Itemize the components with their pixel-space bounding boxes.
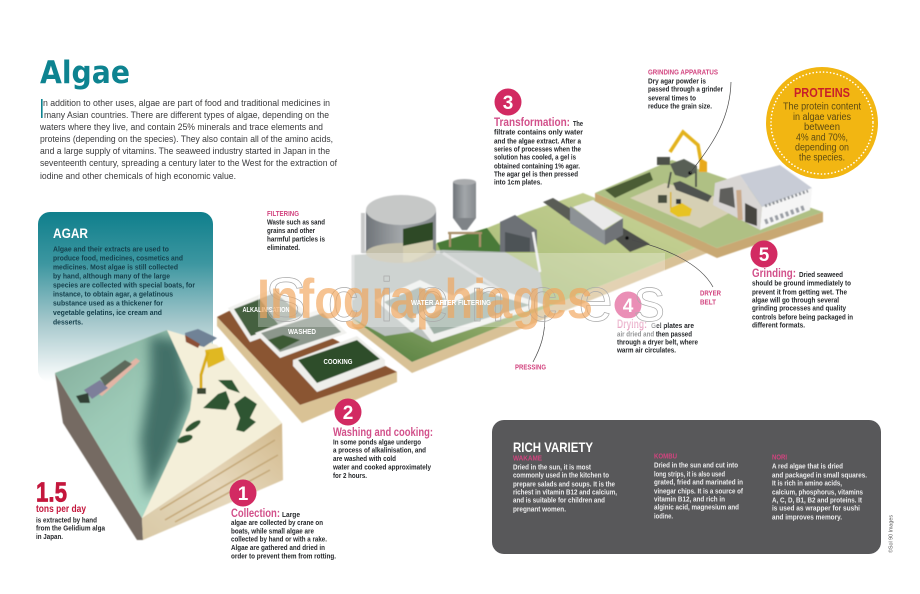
proteins text: 4% and 70%, [796,132,848,144]
pond labels: ALKALINISATION [242,307,290,314]
cooking pond [293,336,385,392]
dryer belt machine [543,198,650,252]
right filter pool [412,282,545,342]
column: kombu: KOMBU [654,454,677,460]
column: wakame: pregnant women. [513,504,566,514]
column: nori: calcium, phosphorus, vitamins [772,488,863,496]
step 3 badge: 3 [503,93,513,114]
seaweed leaves [176,380,257,445]
column: wakame: WAKAME [513,456,542,462]
column: kombu: alginic acid, magnesium and [654,502,739,512]
alkalinisation pond [228,288,315,342]
step 1: collection: Algae are gathered and dried in [231,543,325,552]
label: dryer belt: BELT [700,300,717,306]
drop cap [41,99,43,118]
step 4: drying: through a dryer belt, where [617,338,698,346]
step 4: drying: air dried and then passed [617,330,692,338]
step 4: drying: Gel plates are [651,321,694,330]
column: wakame [513,456,617,514]
label: dryer belt [700,290,721,306]
label: dryer belt: DRYER [700,290,721,298]
column: nori: and improves memory. [772,512,842,522]
column: wakame: commonly used in the kitchen to [513,470,609,480]
leader line: pressing [533,315,545,362]
dark green back lawn [437,228,505,262]
step 2: washing and cooking: In some ponds algae undergo [333,438,421,446]
big silo [353,195,500,300]
watermark fade over drying text [612,318,656,340]
label: filtering: FILTERING [267,211,299,218]
agar text [53,244,195,326]
step 5: grinding: Grinding: [752,266,796,280]
dark shore water [140,335,190,500]
rich variety heading: RICH VARIETY [513,439,594,455]
agar text: desserts. [53,318,83,326]
column: nori: A, C, D, B1, B2 and proteins. It [772,496,862,504]
step 5: grinding: algae will go through several [752,296,839,304]
dryer belt dot [625,236,629,240]
panel: agar [38,212,213,382]
pond labels [242,307,353,366]
step 1: collection: Large [282,510,300,519]
agar text: Algae and their extracts are used to [53,244,169,254]
step 3: transformation: obtained containing 1% agar. [494,162,580,170]
watermark outline text: Sciences [265,266,665,335]
intro text block [39,98,337,182]
agar text: medicines. Most algae is still collected [53,262,178,272]
step 4: drying: Drying: [617,317,647,331]
step 1 badge: 1 [238,484,249,505]
agar text: produce food, medicines, cosmetics and [53,254,183,262]
callout: proteins [766,67,878,179]
illustration: sea and shore block [55,329,283,540]
proteins text: between [804,122,840,133]
stat: 1.5 tons per day [36,476,106,541]
column: kombu: vinegar chips. It is a source of [654,486,743,496]
step 5: grinding: different formats. [752,320,805,330]
step 3: transformation: The [573,119,583,128]
label: water after filtering: WATER AFTER FILTERING [411,300,492,307]
pond labels: COOKING [324,359,353,366]
column: nori: and packaged in small squares. [772,470,867,480]
filter pad [352,250,545,342]
step 2: washing and cooking: water and cooked approximately [332,462,432,472]
label: filtering: Waste such as sand [267,218,325,226]
proteins text [783,102,861,164]
intro text block: many Asian countries. There are different types of algae, depending on the [44,110,329,121]
stat: 1.5 tons per day: tons per day [36,504,86,515]
proteins text: depending on [795,142,849,154]
step 4: drying: warm air circulates. [616,346,676,354]
step 5: grinding: prevent it from getting wet. The [752,288,847,296]
intro text block: n addition to other uses, algae are part of food and traditional medicines in [43,98,330,109]
label: pressing: PRESSING [515,364,546,372]
leader line: dryer belt [632,240,713,287]
crane boat [185,329,217,348]
column: kombu: Dried in the sun and cut into [654,460,738,470]
illustration: washing ponds platform [217,288,397,423]
yellow excavator [197,347,225,394]
callout: proteins: PROTEINS [794,86,850,100]
step 4 badge: 4 [623,296,634,317]
step 5: grinding [750,240,853,330]
agar text: instance, to obtain agar, a gelatinous [53,290,173,298]
column: nori: is used as wrapper for sushi [772,504,860,512]
step 3: transformation: series of processes when the [494,144,581,154]
watermark orange text: Infographiages [257,267,593,330]
column: kombu: long strips, it is also used [654,470,725,478]
agar text: by hand, although many of the large [53,272,170,280]
step 1: collection [230,480,336,560]
agar heading: AGAR [53,226,88,241]
title: Algae [40,55,130,91]
column: nori [772,454,867,522]
crate [658,195,667,203]
step 5: grinding: should be ground immediately to [752,278,851,288]
label: filtering [267,211,325,252]
image credit: ©Sol 90 Images [888,514,894,553]
intro text block: iodine and other chemicals of high economic value. [40,171,236,182]
agar text: species are collected with special boats, for [53,280,195,290]
step 3: transformation: and the algae extract. After a [494,136,582,146]
label: grinding apparatus: Dry agar powder is [648,76,706,86]
stat: 1.5 tons per day: from the Gelidium alga [36,524,106,532]
left filter pool [375,280,458,332]
label: grinding apparatus: passed through a grinder [648,84,723,94]
label: filtering: harmful particles is [267,234,325,244]
storage bins [605,172,653,198]
column: kombu [654,454,743,520]
label: grinding apparatus [648,70,723,110]
proteins text: in algae varies [793,112,851,123]
illustration: grinding platform [595,132,823,258]
warehouse building [713,165,812,230]
forklift [670,192,692,217]
leader line: grinding apparatus [690,82,731,173]
step 5: grinding: grinding processes and quality [752,304,847,312]
step 1: collection: order to prevent them from rotting. [231,552,336,560]
conveyor [673,181,712,202]
step 3: transformation: Transformation: [494,115,570,129]
step 3: transformation [494,88,583,186]
step 2: washing and cooking: Washing and cooking: [333,425,433,439]
proteins text: the species. [799,152,845,164]
proteins text: The protein content [783,102,861,112]
intro text block: and a large supply of vitamins. The seaweed industry started in Japan in the [40,146,330,157]
column: wakame: richest in vitamin B12 and calcium, [513,488,617,496]
label: grinding apparatus: several times to [648,94,696,102]
yellow crane [657,132,707,175]
watermark band [258,253,665,327]
intro text block: seventeenth century, spreading a century later to the West for the extraction of [40,158,337,169]
stat: 1.5 tons per day: 1.5 [36,476,67,508]
stat: 1.5 tons per day: is extracted by hand [36,516,97,524]
step 5 badge: 5 [759,245,770,266]
label: filtering: grains and other [267,226,315,235]
step 5: grinding: controls before being packaged in [752,312,853,322]
agar text: substance used as a thickener for [53,298,163,308]
step 2: washing and cooking [332,398,433,480]
column: kombu: grated, fried and marinated in [654,478,743,486]
intro text block: proteins (depending on the species). They also contain all of the amino acids, [40,134,333,145]
label: grinding apparatus: reduce the grain size. [648,102,712,110]
step 3: transformation: filtrate contains only water [494,128,583,136]
pressing machine [500,215,540,272]
column: kombu: vitamin B12, and rich in [654,494,725,504]
intro text block: waters where they live, and contain 25% minerals and trace elements and [39,122,323,133]
panel: rich variety [492,420,881,554]
label: filtering: eliminated. [267,243,300,252]
column: nori: A red algae that is dried [772,462,843,470]
column: nori: It is rich in amino acids, [772,478,842,488]
column: wakame: Dried in the sun, it is most [513,462,591,472]
small silo [448,179,482,247]
step 3: transformation: The agar gel is then pressed [494,170,578,178]
step 1: collection: boats, while small algae are [231,526,314,536]
step 1: collection: Collection: [231,506,280,520]
step 2 badge: 2 [343,403,353,424]
step 2: washing and cooking: for 2 hours. [333,471,367,480]
label: grinding apparatus: GRINDING APPARATUS [648,70,718,76]
column: nori: NORI [772,454,787,462]
step 2: washing and cooking: a process of alkalinisation, and [333,446,426,454]
ship [76,358,140,403]
column: kombu: iodine. [654,512,673,520]
step 4: drying [614,292,698,354]
step 2: washing and cooking: are washed with cold [333,454,396,463]
step 3: transformation: into 1cm plates. [494,178,542,186]
hopper [668,159,697,188]
washed pond [255,308,347,358]
column: wakame: prepare salads and soups. It is the [513,480,615,488]
pond labels: WASHED [288,329,316,336]
stat: 1.5 tons per day: in Japan. [36,532,63,541]
step 1: collection: algae are collected by crane on [231,518,323,527]
agar text: vegetable gelatins, ice cream and [53,308,162,317]
step 1: collection: collected by hand or with a rake. [231,534,327,544]
step 5: grinding: Dried seaweed [799,270,843,279]
column: wakame: and is suitable for children and [513,496,605,504]
step 3: transformation: solution has cooled, a gel is [494,152,576,162]
illustration: filtering and drying platform [352,179,707,373]
